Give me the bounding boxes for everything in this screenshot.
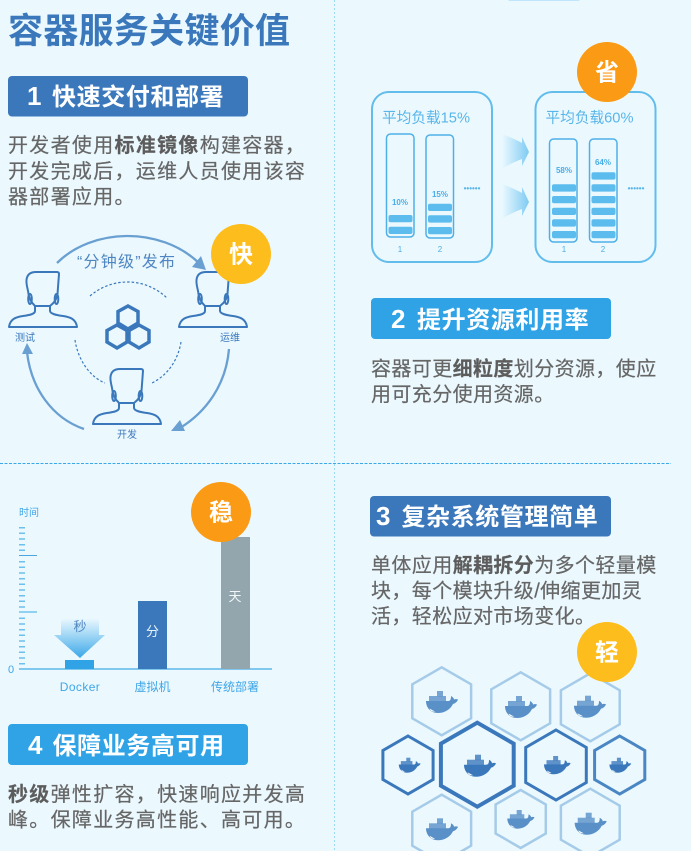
text block: fast delivery description: 开发完成后，运维人员使用该容 <box>8 160 306 183</box>
chart: load 15 percent: •••••• <box>464 184 481 193</box>
text block: resource description: 容器可更细粒度划分资源，使应 <box>371 358 657 380</box>
label: ops: 运维 <box>220 331 240 344</box>
chart: load 15 percent: 平均负载15% <box>382 110 470 126</box>
text block: availability description: 峰。保障业务高性能、高可用。 <box>8 808 306 832</box>
chart: load 15 percent: 15% <box>432 190 448 199</box>
axis: 0 <box>8 664 14 676</box>
axis: 时间 <box>19 506 39 519</box>
text block: fast delivery description: 开发者使用标准镜像构建容器， <box>8 135 306 157</box>
heading: 1 fast delivery <box>8 76 248 116</box>
badge: fast: 快 <box>229 242 253 268</box>
heading: 3 simple management <box>370 496 611 536</box>
chart: load 15 percent: 1 <box>398 245 403 254</box>
badge: light <box>577 622 637 682</box>
panel: 4 high availability <box>8 482 313 832</box>
badge: stable: 稳 <box>209 500 233 526</box>
bar: virtual machine: 虚拟机 <box>134 680 171 694</box>
arrow: ops to dev <box>171 349 229 431</box>
text block: resource description: 用可充分使用资源。 <box>371 383 555 406</box>
heading: 3 simple management: 3 <box>376 501 391 531</box>
heading: 4 high availability <box>8 724 248 765</box>
chart: load 60 percent <box>536 92 656 262</box>
text block: management description: 块，每个模块升级/伸缩更加灵 <box>371 580 642 602</box>
bar: docker <box>54 618 105 694</box>
title: 容器服务关键价值 <box>8 12 290 51</box>
heading: 2 resource utilization: 提升资源利用率 <box>417 307 589 334</box>
label: minute-level release: “分钟级”发布 <box>77 253 175 271</box>
text block: management description: 活，轻松应对市场变化。 <box>371 605 595 628</box>
bar: traditional deployment <box>211 537 259 694</box>
chart: load 60 percent: 平均负载60% <box>546 110 634 126</box>
panel: 1 fast delivery <box>8 76 313 441</box>
arrows: improvement <box>502 134 529 219</box>
chart: load 15 percent: 10% <box>392 198 408 207</box>
heading: 1 fast delivery: 1 <box>27 81 42 111</box>
chart: load 60 percent: 1 <box>562 245 567 254</box>
panel: 3 simple management <box>370 496 663 851</box>
chart: deployment time comparison <box>8 506 272 694</box>
icon: tester <box>9 272 77 327</box>
heading: 4 high availability: 保障业务高可用 <box>52 733 225 760</box>
chart: load 15 percent: 2 <box>438 245 443 254</box>
bar: docker: Docker <box>60 680 100 694</box>
icon: whales <box>399 691 631 840</box>
bar: docker: 秒 <box>73 619 87 634</box>
text block: management description: 单体应用解耦拆分为多个轻量模 <box>371 555 657 577</box>
chart: load 60 percent: 64% <box>595 158 611 167</box>
heading: 2 resource utilization <box>371 298 611 339</box>
heading: 1 fast delivery: 快速交付和部署 <box>52 83 224 111</box>
badge: fast <box>211 224 271 284</box>
chart: load 15 percent <box>372 92 492 262</box>
badge: stable <box>191 482 251 542</box>
diagram: release cycle <box>9 236 247 441</box>
axis <box>8 506 272 676</box>
chart: load 60 percent: 58% <box>556 166 572 175</box>
heading: 2 resource utilization: 2 <box>391 304 406 334</box>
bar: traditional deployment: 传统部署 <box>211 679 259 694</box>
arrow: test to ops <box>57 236 206 270</box>
label: dev: 开发 <box>117 428 137 441</box>
badge: save: 省 <box>595 60 619 86</box>
chart: load 60 percent: 2 <box>601 245 606 254</box>
bar: traditional deployment: 天 <box>228 589 242 604</box>
diagram: hexagon containers <box>383 667 645 851</box>
panel: 2 resource utilization <box>371 42 663 406</box>
text block: fast delivery description: 器部署应用。 <box>8 186 136 208</box>
icon: hexagon cluster <box>107 306 149 348</box>
arrow: dev to test <box>22 343 84 429</box>
icon: ops <box>179 272 247 327</box>
label: test: 测试 <box>15 331 35 344</box>
bar: virtual machine <box>134 601 171 694</box>
chart: load 60 percent: •••••• <box>628 184 645 193</box>
badge: save <box>577 42 637 102</box>
icon: developer <box>93 369 161 424</box>
heading: 3 simple management: 复杂系统管理简单 <box>402 504 598 531</box>
heading: 4 high availability: 4 <box>28 730 43 760</box>
bar: virtual machine: 分 <box>146 624 159 639</box>
text block: availability description: 秒级弹性扩容，快速响应并发高 <box>8 784 306 806</box>
badge: light: 轻 <box>595 640 619 666</box>
